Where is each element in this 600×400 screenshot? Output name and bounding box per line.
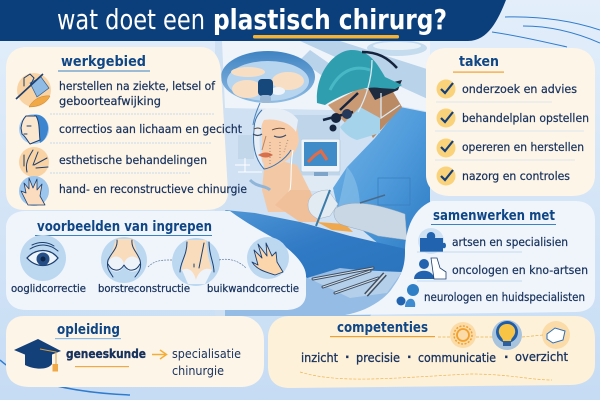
icon: handshake — [542, 321, 570, 349]
label: buikwandcorrectie: buikwandcorrectie — [207, 283, 299, 295]
heading: samenwerken met: samenwerken met — [433, 208, 555, 224]
text: competenties list: · — [345, 350, 350, 364]
text: competenties list: overzicht — [515, 350, 568, 364]
panel: taken — [426, 48, 595, 196]
heading: opleiding: opleiding — [57, 322, 120, 338]
text: competenties list: precisie — [356, 351, 400, 365]
icon: abdomen — [172, 238, 220, 286]
illustration: monitor — [300, 139, 340, 191]
icon: graduation cap — [14, 339, 61, 372]
text: competenties list: inzicht — [301, 351, 338, 365]
label: borstreconstructie: borstreconstructie — [98, 283, 190, 295]
list: taken items: behandelplan opstellen — [462, 111, 589, 125]
icon: gear — [450, 322, 476, 348]
text: herstellen: herstellen na ziekte, letsel of — [59, 79, 216, 93]
list: taken items: onderzoek en advies — [462, 82, 577, 96]
icon: eye — [20, 235, 66, 281]
icon: surgical lamp — [221, 51, 315, 125]
list: taken items: opereren en herstellen — [462, 140, 584, 154]
panel: opleiding — [6, 316, 264, 387]
text: specialisatie chirurgie — [172, 346, 241, 378]
text: specialisatie chirurgie: specialisatie — [172, 346, 241, 361]
panel: competenties — [268, 316, 595, 388]
text: competenties list: · — [407, 350, 412, 364]
text: neurologen: neurologen en huidspecialisten — [424, 290, 585, 304]
text: competenties list: communicatie — [418, 351, 496, 365]
panel: werkgebied — [6, 47, 247, 210]
icon: light bulb — [492, 320, 522, 350]
heading: taken: taken — [459, 54, 499, 70]
text: geneeskunde: geneeskunde — [66, 347, 146, 361]
text: artsen: artsen en specialisien — [452, 235, 568, 249]
icon: person and hand — [414, 258, 446, 279]
heading: competenties: competenties — [337, 320, 428, 336]
illustration: patient face hologram — [235, 108, 312, 212]
header banner — [0, 0, 506, 41]
illustration: operating room scene — [215, 40, 430, 316]
label: ooglidcorrectie: ooglidcorrectie — [11, 283, 86, 295]
icon: fingers — [19, 147, 49, 177]
heading: voorbeelden: voorbeelden van ingrepen — [37, 219, 212, 235]
list: taken items — [436, 80, 589, 186]
panel: voorbeelden van ingrepen — [6, 211, 306, 310]
arrow — [152, 350, 166, 359]
title — [57, 3, 447, 38]
text: correctios: correctios aan lichaam en gecicht — [59, 122, 242, 136]
text: competenties list — [301, 350, 568, 365]
text: specialisatie chirurgie: chinurgie — [172, 363, 224, 378]
icon: neurologist — [396, 284, 419, 307]
icon: hand — [247, 237, 289, 279]
text: herstellen — [59, 79, 216, 108]
illustration: drape and instruments — [225, 190, 410, 316]
title: plastisch chirurg? — [213, 3, 447, 36]
icon: mesh and hand — [16, 73, 51, 107]
heading: werkgebied: werkgebied — [61, 54, 146, 70]
icon: puzzle — [418, 228, 446, 254]
list: taken items: nazorg en controles — [462, 169, 570, 183]
text: competenties list: · — [504, 350, 509, 364]
illustration: surgeon — [317, 50, 430, 260]
panel: samenwerken met — [345, 201, 595, 315]
text: esthetische: esthetische behandelingen — [59, 153, 207, 167]
title: wat doet een — [57, 3, 205, 36]
text: herstellen: geboorteafwijking — [59, 94, 161, 108]
text: oncologen: oncologen en kno-artsen — [452, 263, 588, 277]
text: geneeskunde — [66, 347, 146, 367]
icon: head profile — [19, 114, 49, 144]
illustration: gloved hands — [308, 190, 407, 240]
icon: hand — [19, 176, 49, 206]
icon: breast — [101, 237, 147, 283]
text: hand en reconstructieve: hand- en reconstructieve chinurgie — [59, 182, 247, 196]
